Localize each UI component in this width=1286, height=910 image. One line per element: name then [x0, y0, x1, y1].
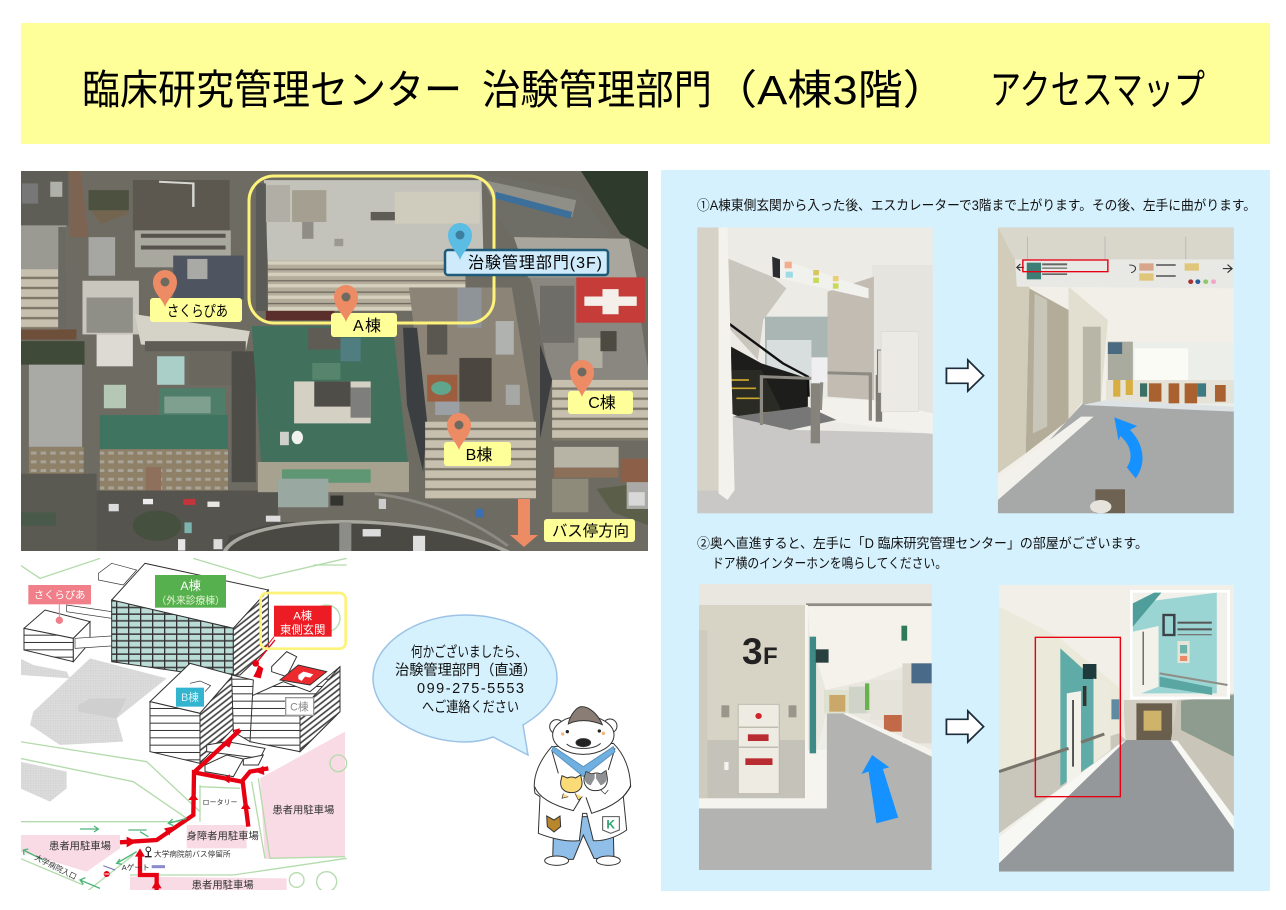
pin and label: building B: B棟: [466, 446, 492, 464]
title banner: [21, 23, 1270, 144]
pin and label: building C: C棟: [588, 394, 616, 412]
green-roof main building: [252, 326, 409, 507]
entrance canopy: [205, 742, 265, 777]
pin and label: Sakurapia: さくらぴあ: [167, 303, 228, 320]
highlight around A building: [249, 176, 494, 323]
bus stop direction arrow: [510, 499, 538, 547]
Sakurapia building: [24, 563, 137, 662]
campus roads and green outlines: [20, 558, 347, 892]
C building roof and facade: [514, 237, 650, 440]
step 1 text: ①A棟東側玄関から入った後、エスカレーターで3階まで上がります。その後、左手に曲がります。: [697, 198, 1256, 213]
map place names: 大学病院前バス停留所: [154, 849, 231, 859]
pin and label: building C: [568, 360, 633, 414]
map place names: 患者用駐車場: [192, 879, 254, 892]
speech bubble with contact details: へご連絡ください: [422, 699, 519, 716]
label: bus stop direction: [544, 519, 635, 542]
step 2 text: [697, 535, 1148, 571]
title banner: （A棟3階）: [712, 67, 948, 113]
map place names: 大学病院入口: [33, 852, 79, 882]
label: building B: [176, 688, 204, 707]
title banner: 臨床研究管理センター: [82, 67, 462, 113]
label: building A outpatient: （外来診療棟）: [156, 594, 225, 607]
mascot: polar bear in doctor's coat holding cats: [534, 707, 631, 865]
aerial photo of the hospital campus: [20, 170, 650, 556]
map place names: 患者用駐車場: [272, 803, 334, 816]
label: building A east entrance: [265, 606, 332, 648]
step 1 photo: escalator entrance: [697, 227, 933, 513]
map place names: 身障者用駐車場: [187, 829, 259, 842]
parking areas: [20, 732, 345, 892]
label: building A east entrance: 東側玄関: [280, 623, 325, 636]
title banner: アクセスマップ: [990, 67, 1205, 113]
blue forward arrow: [861, 755, 898, 823]
B building roof and facade: [403, 287, 536, 499]
3F wall sign: 3: [742, 631, 763, 672]
building B: [150, 663, 253, 763]
label: building C: C棟: [290, 700, 309, 713]
map place names: Aゲート: [122, 863, 150, 872]
step 2 photo: 3F corridor: [699, 584, 932, 870]
speech bubble with contact details: [373, 615, 557, 755]
step 2 text: ドア横のインターホンを鳴らしてください。: [712, 556, 947, 571]
map place names: ロータリー: [203, 797, 237, 806]
pin and label: building A: A棟: [353, 317, 381, 335]
speech bubble with contact details: 何かございましたら、: [411, 643, 527, 661]
highlight around east entrance: [261, 593, 346, 649]
label: Sakurapia: さくらぴあ: [34, 589, 85, 601]
label: building A outpatient: [155, 575, 226, 608]
building C: [250, 652, 340, 752]
label: Sakurapia: [28, 585, 91, 624]
3F wall sign: F: [763, 643, 778, 670]
helipad: [576, 277, 645, 323]
step 2 text: ②奥へ直進すると、左手に「D 臨床研究管理センター」の部屋がございます。: [697, 535, 1148, 551]
speech bubble with contact details: 治験管理部門（直通）: [395, 661, 537, 679]
red access route: [120, 730, 268, 893]
title banner: 治験管理部門: [482, 67, 712, 113]
arrow to next photo: [946, 711, 984, 742]
pin and label: clinical trial office: [445, 223, 608, 275]
step 2 photo: corridor to room D: [999, 585, 1234, 872]
label: building A outpatient: A棟: [180, 578, 202, 593]
blue turn arrow: [1114, 417, 1143, 478]
pin and label: building A: [331, 285, 397, 337]
map place names: [33, 797, 334, 892]
grey background buildings: [20, 658, 167, 802]
red highlight on door: [1035, 637, 1120, 797]
inset photo of door sign: [1130, 590, 1230, 699]
label: building B: B棟: [181, 691, 199, 704]
speech bubble with contact details: 099-275-5553: [417, 681, 524, 697]
route direction arrowheads: [127, 640, 275, 888]
green one-way arrows: [23, 818, 187, 888]
arrow to next photo: [946, 360, 984, 391]
label: building A east entrance: A棟: [293, 608, 313, 622]
pin and label: building B: [444, 413, 511, 466]
A building roof and facade: [256, 180, 484, 320]
pin and label: clinical trial office: 治験管理部門(3F): [468, 254, 602, 272]
mascot: polar bear in doctor's coat holding cats: K: [606, 818, 615, 832]
step 1 photo: corridor with overhead sign: [998, 227, 1234, 513]
label: bus stop direction: バス停方向: [552, 522, 629, 540]
right panel: route instructions: [661, 170, 1270, 891]
pin and label: Sakurapia: [150, 270, 242, 322]
3F wall sign: [742, 631, 778, 672]
building A: [112, 563, 268, 675]
label: building C: [286, 698, 314, 715]
illustrated route map: [20, 558, 348, 893]
red highlight on sign: [1023, 260, 1108, 272]
map place names: 患者用駐車場: [49, 839, 111, 852]
